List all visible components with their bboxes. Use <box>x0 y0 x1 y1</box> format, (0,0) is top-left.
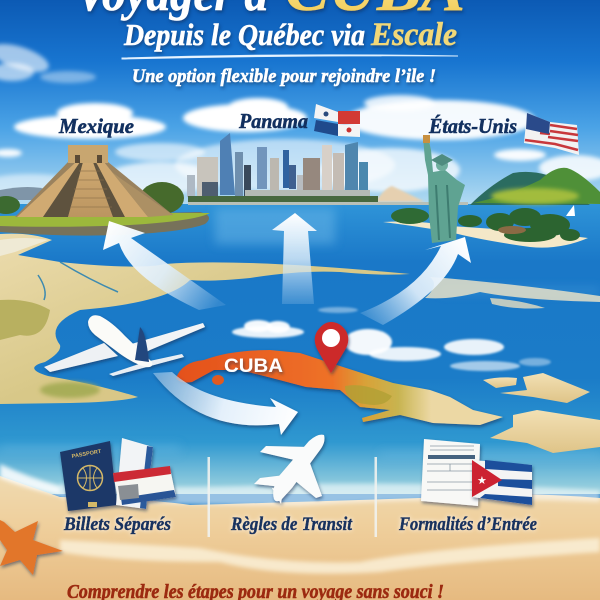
subtitle line: Depuis le Québec via <box>123 17 365 52</box>
Cuba map shape <box>176 350 503 425</box>
label: Mexique: Mexique <box>58 114 134 138</box>
icon: USA flag <box>524 113 579 155</box>
label: CUBA: CUBA <box>224 356 283 377</box>
sea foam <box>0 464 600 574</box>
beach sand <box>0 476 600 600</box>
arrow to Panama <box>272 213 317 304</box>
label: Formalités d'Entrée: Formalités d’Entrée <box>398 514 537 535</box>
subtitle Escale: Escale <box>370 17 457 53</box>
icon: entry form <box>421 439 480 506</box>
icon: starfish <box>0 520 63 575</box>
Chichen Itza pyramid <box>15 145 173 217</box>
tagline: Une option flexible pour rejoindre l’ile ! <box>132 66 436 87</box>
airplane over the map <box>44 315 205 376</box>
arrow to États-Unis <box>360 237 471 325</box>
clouds in the sky <box>0 38 600 198</box>
label: Billets Séparés: Billets Séparés <box>63 514 171 535</box>
label: Règles de Transit: Règles de Transit <box>230 514 353 535</box>
icon: airline tickets <box>113 438 176 509</box>
sky background <box>0 0 600 206</box>
icon: Cuba flag <box>472 460 532 505</box>
sea <box>0 204 600 494</box>
divider <box>374 457 377 537</box>
label: États-Unis: États-Unis <box>428 114 517 138</box>
water reflections <box>0 208 600 458</box>
icon: red map pin <box>315 322 348 373</box>
Caribbean islands <box>483 373 600 453</box>
tropical island <box>383 205 588 248</box>
Panama City skyline <box>187 133 468 205</box>
icon: Panama flag <box>314 104 360 137</box>
statue of liberty <box>423 135 465 243</box>
divider <box>208 457 210 537</box>
curved arrow toward Cuba <box>153 372 298 435</box>
label: Panama: Panama <box>238 109 308 133</box>
Mexican coast <box>0 182 210 236</box>
icon: passport <box>60 441 117 511</box>
land masses on the map <box>0 234 600 404</box>
light clouds over the sea <box>232 307 551 371</box>
icon: Cuba flag: ★ <box>477 474 487 487</box>
arrow to Mexique <box>103 221 226 310</box>
icon: white airplane <box>254 435 324 504</box>
icon: passport: PASSPORT <box>71 449 102 460</box>
distant hills <box>0 168 600 205</box>
